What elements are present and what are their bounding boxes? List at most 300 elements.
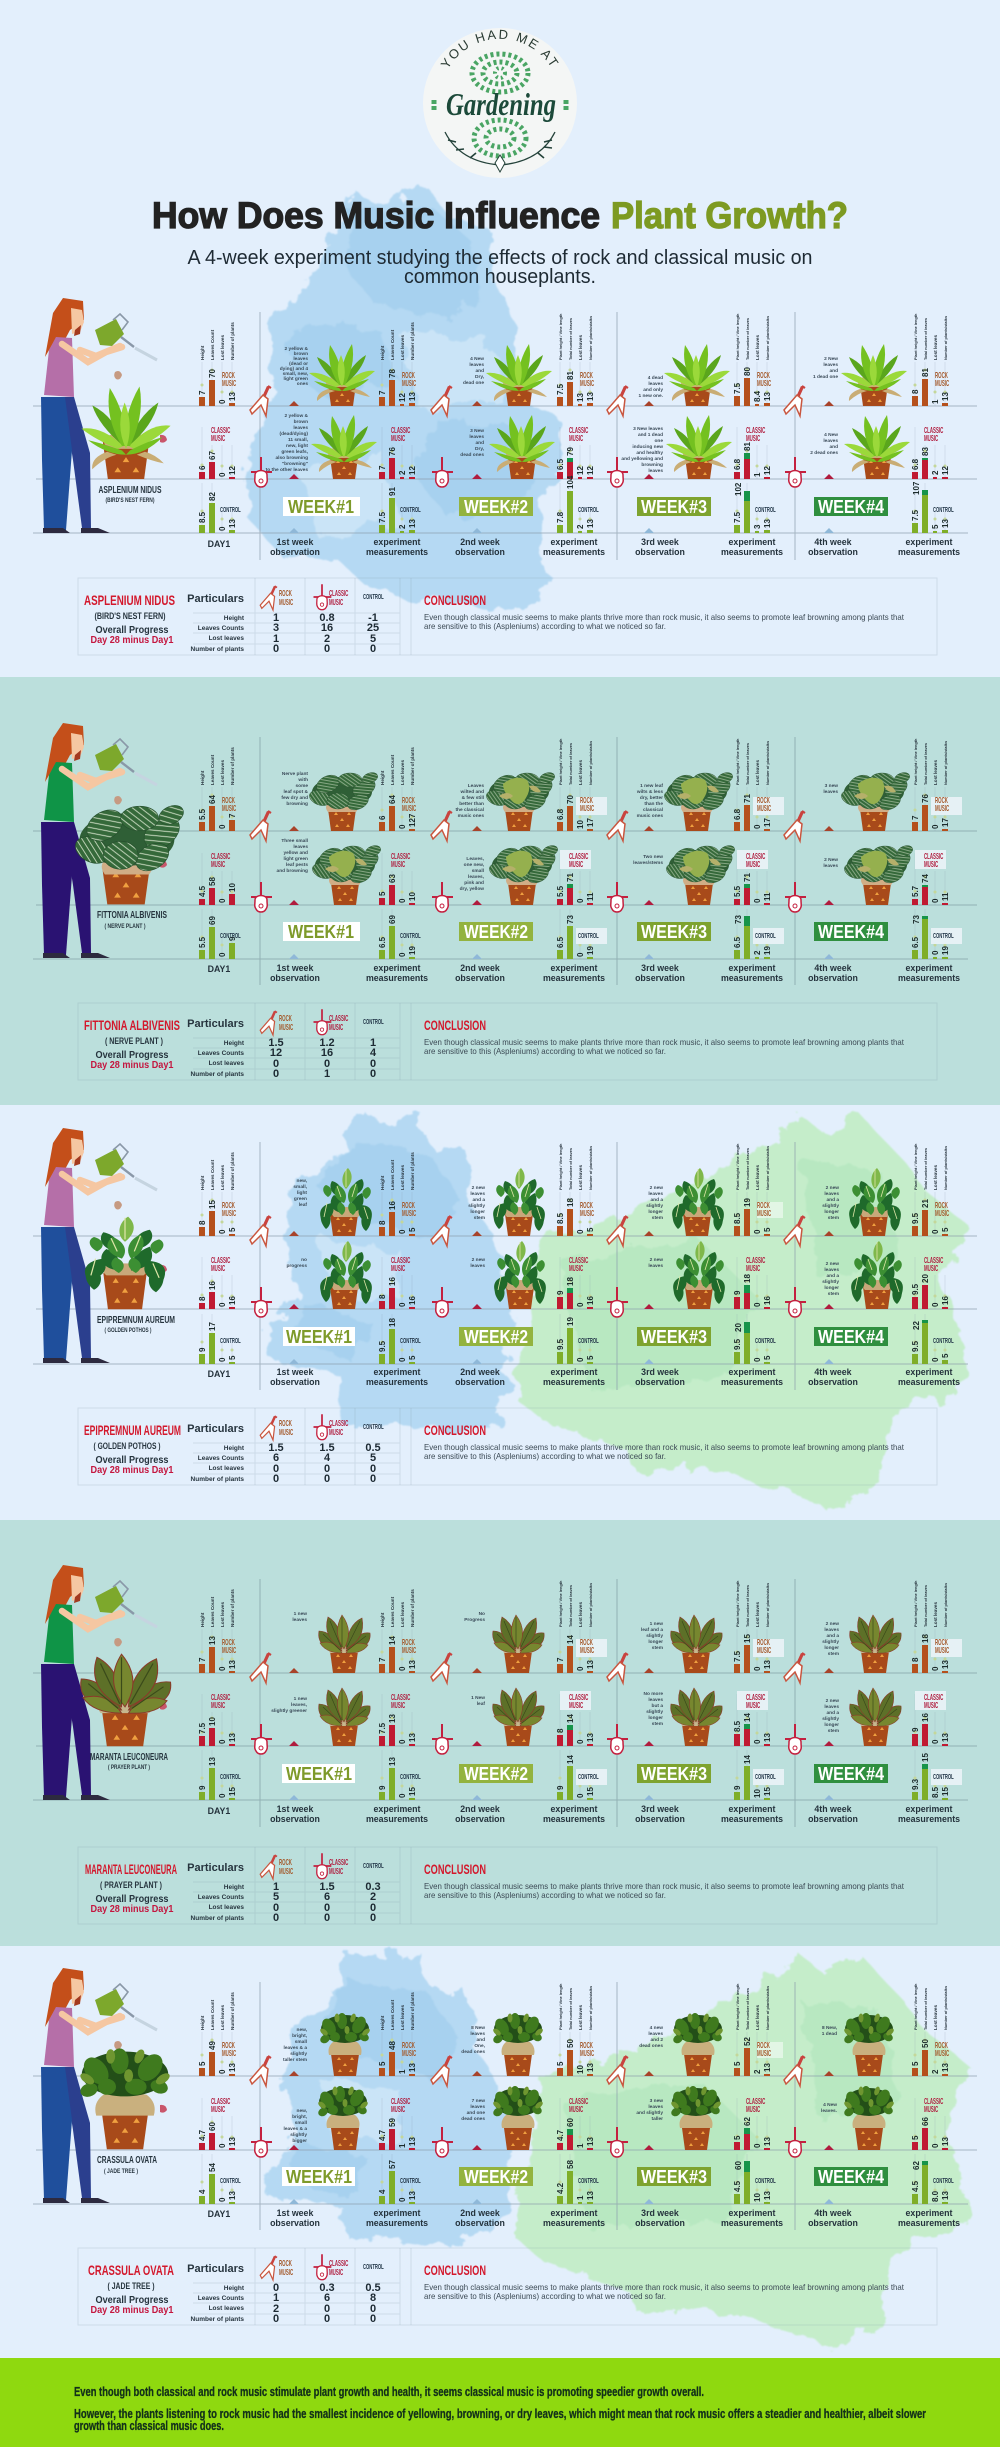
classic row day 1: 0 [218,898,227,903]
rock row week 1: 127 [408,813,417,827]
rock row week 3 [733,1143,783,1236]
observation notes [277,771,838,892]
summary table and conclusion: Particulars [187,2263,244,2275]
control row week 3: CONTROL [755,507,776,514]
observation notes: leaves [469,434,484,440]
summary table and conclusion: CONTROL [363,2264,384,2271]
observation notes: small [472,868,484,874]
summary table and conclusion: 1.2 [319,1037,335,1049]
control row week 1: 57 [388,2160,397,2169]
rock row day 1: Lost leaves [220,335,225,360]
control row week 1: 5 [408,1355,417,1360]
classic row week 1: 13 [408,1733,417,1742]
timeline labels: observation [808,2218,858,2228]
control row week 1: 15 [408,1787,417,1796]
observation notes: dry, better [640,795,663,801]
observation notes: and [475,440,484,446]
rock row day 1: ROCK [222,2042,235,2050]
classic row week 1: 13 [408,2137,417,2146]
summary table and conclusion: ( NERVE PLANT ) [105,1036,163,1047]
rock row week 3: 52 [743,2037,752,2046]
timeline labels: experiment [729,1367,776,1377]
observation notes: wilted and [460,789,484,795]
observation notes: browning [286,801,308,807]
rock row week 3: Plant height / Vine length [735,1983,740,2030]
control row day 1: 5.5 [198,936,207,948]
classic row week 3: 14 [743,1713,752,1722]
control row day 1: 82 [208,492,217,501]
rock row day 1: 5 [228,1227,237,1232]
week badges: WEEK#1 [286,2167,352,2187]
summary table and conclusion: 0 [273,643,279,655]
observation notes: 2 yellow & [285,413,309,419]
rock row week 3: Lost leaves [755,335,760,360]
control row day 1: CONTROL [220,1338,241,1345]
timeline labels: measurements [721,1377,783,1387]
observation notes: and [476,2037,485,2043]
summary table and conclusion: 0 [370,643,376,655]
summary table and conclusion: 16 [321,622,333,634]
control row week 1: 69 [388,915,397,924]
classic row week 2: MUSIC [569,861,583,869]
summary table and conclusion: 0 [370,1473,376,1485]
observation notes: small, [293,1184,308,1190]
week badges: WEEK#1 [288,497,354,517]
timeline labels: 3rd week [641,537,679,547]
timeline labels: measurements [898,1377,960,1387]
summary table and conclusion: 12 [270,1047,282,1059]
summary table and conclusion: MUSIC [329,599,343,607]
classic row week 3: 0 [753,898,762,903]
control row week 3: 5 [763,1355,772,1360]
observation notes: small, new, [283,371,309,377]
rock row week 1: Lost leaves [400,760,405,785]
rock row week 3: Number of plants/stalks [765,1146,770,1190]
plant name: ( NERVE PLANT ) [104,923,146,930]
observation notes: leaves [470,2031,485,2037]
rock row day 1: 13 [208,1636,217,1645]
rock row week 2: 18 [566,1198,575,1207]
summary table and conclusion: Number of plants [191,1476,244,1483]
control row week 4: 15 [941,1787,950,1796]
observation notes: 1 New [471,1695,485,1701]
rock row week 2: 81 [566,371,575,380]
control row week 3 [733,1750,784,1800]
observation notes: Dry, [475,446,485,452]
control row day 1: 0 [218,952,227,957]
observation notes [286,1179,839,1297]
control row week 1 [378,1314,421,1364]
control row day 1: 5 [228,1355,237,1360]
classic row week 1 [378,1257,417,1309]
summary table and conclusion: MARANTA LEUCONEURA [85,1861,177,1877]
timeline labels: experiment [551,537,598,547]
control row week 3: CONTROL [755,1338,776,1345]
observation notes: and slightly [636,2110,663,2116]
observation notes: 8 New [471,2025,485,2031]
observation notes: No [479,1611,485,1617]
summary table and conclusion: 0 [273,1473,279,1485]
classic row week 4: MUSIC [924,435,938,443]
observation notes: and a [826,1197,839,1203]
summary table and conclusion: 16 [321,1047,333,1059]
rock row week 2 [556,738,607,831]
observation notes: leaves [293,356,308,362]
summary table and conclusion: FITTONIA ALBIVENIS [84,1017,180,1033]
observation notes: slightly [290,2051,307,2057]
rock row week 3: ROCK [757,1639,770,1647]
observation notes: with [297,777,308,783]
rock row week 3: 13 [763,392,772,401]
summary table and conclusion: EPIPREMNUM AUREUM [84,1422,181,1438]
summary table and conclusion: ROCK [279,1420,292,1428]
control row week 3: 73 [734,915,743,924]
summary table and conclusion: MUSIC [329,1024,343,1032]
axis lines and dividers [33,1982,977,2230]
rock row week 3: MUSIC [757,1210,771,1218]
logo: you had me at gardening [423,28,577,178]
control row week 1: 4 [378,2189,387,2194]
timeline labels: experiment [551,963,598,973]
rock row day 1 [198,1152,237,1236]
summary table and conclusion: Overall Progress [96,1893,169,1905]
summary table and conclusion: Particulars [187,593,244,605]
timeline labels: observation [635,547,685,557]
rock row day 1: Height [200,1175,205,1190]
observation notes: and only [643,387,663,393]
plant name [98,485,162,504]
timeline labels [208,963,960,983]
observation notes: 2 new [650,1257,663,1263]
rock row week 1: Leaves Count [390,1999,395,2030]
rock row week 2: Total number of leaves [568,1148,573,1190]
classic row week 4 [911,1691,950,1746]
control row week 2: 15 [586,1787,595,1796]
summary table and conclusion: are sensitive to this (Aspleniums) according to what we noticed so far. [424,621,666,631]
classic row week 2: 0 [576,1302,585,1307]
timeline labels: DAY1 [208,964,230,974]
week badges: WEEK#2 [464,497,528,517]
control row week 1: 19 [408,946,417,955]
rock row week 2: 0 [576,1666,585,1671]
plant name: ( JADE TREE ) [104,2168,138,2175]
classic row week 3: CLASSIC [746,1257,765,1265]
control row day 1: 13 [208,1757,217,1766]
observation notes: leaves [648,381,663,387]
classic row day 1: MUSIC [211,2106,225,2114]
rock row week 3 [733,1983,783,2076]
rock row week 4: Total number of leaves [923,1585,928,1627]
summary table and conclusion: 4 [370,1047,377,1059]
instrument icons and markers [250,1653,834,1800]
control row week 3: 10 [753,1789,762,1798]
rock row week 3: ROCK [757,797,770,805]
summary table and conclusion: 1 [273,633,279,645]
classic row week 1: 0 [398,1739,407,1744]
summary table and conclusion: Day 28 minus Day1 [90,1904,174,1915]
control row day 1: 13 [228,519,237,528]
rock row week 3: Lost leaves [755,2005,760,2030]
observation notes: light green [283,856,308,862]
timeline labels: 4th week [814,963,852,973]
control row week 2: 0 [576,952,585,957]
control row day 1: 0 [218,2197,227,2202]
summary table and conclusion: Height [224,1445,245,1452]
timeline labels: observation [270,547,320,557]
rock row week 2: 5 [586,1227,595,1232]
observation notes: and 2 [650,2037,663,2043]
control row day 1 [198,1314,241,1364]
control row week 3: 9 [733,1785,742,1790]
panel: epipremnum aureum [33,1128,977,1485]
observation notes: 8 New, [822,2025,838,2031]
summary table and conclusion: Number of plants [191,1915,244,1922]
summary table and conclusion: ( PRAYER PLANT ) [100,1880,162,1891]
observation notes: slightly [646,1633,663,1639]
timeline labels: DAY1 [208,539,230,549]
rock row week 1: MUSIC [402,1647,416,1655]
observation notes: leaves & a [284,2126,307,2132]
observation notes: stem [828,1291,839,1297]
day 1 plant [72,802,186,904]
week badges: WEEK#3 [641,922,707,942]
classic row day 1 [198,1694,237,1746]
timeline labels: 1st week [277,537,313,547]
rock row week 3: 19 [743,1198,752,1207]
rock row week 4: 5 [911,2061,920,2066]
summary table and conclusion: 0.3 [319,2282,335,2294]
timeline labels: experiment [374,963,421,973]
rock row week 2: Number of plants/stalks [588,1583,593,1627]
rock row week 2: 7.5 [556,383,565,395]
rock row week 4: Lost leaves [933,1165,938,1190]
classic row week 3: 0 [753,1739,762,1744]
summary table and conclusion: ROCK [279,2260,292,2268]
classic row week 4: 16 [921,1713,930,1722]
rock row week 3: MUSIC [757,805,771,813]
timeline labels: experiment [374,1367,421,1377]
timeline labels: DAY1 [208,1806,230,1816]
logo: you had me at gardening: YOU HAD ME AT [440,30,559,66]
observation notes: 1 new one. [638,393,663,399]
summary table and conclusion: Leaves Counts [198,625,244,632]
classic row week 1: 7.5 [378,1722,387,1734]
control row week 4: 13 [941,2191,950,2200]
timeline labels: observation [635,1377,685,1387]
classic row week 2: CLASSIC [569,853,588,861]
summary table and conclusion: 0 [370,2313,376,2325]
observation notes: One, [474,2043,486,2049]
summary table and conclusion: 2 [370,1891,376,1903]
classic row day 1: 0 [218,472,227,477]
summary table and conclusion: Day 28 minus Day1 [90,2305,174,2316]
observation notes: slightly [822,1279,839,1285]
timeline labels: experiment [374,1804,421,1814]
classic row week 3 [733,850,772,905]
rock row week 1: Number of plants [410,1152,415,1190]
observation notes [266,346,838,474]
rock row day 1: Leaves Count [210,1596,215,1627]
control row day 1: 13 [228,2191,237,2200]
timeline labels [208,537,960,557]
rock row week 4: 50 [921,2039,930,2048]
timeline labels: measurements [366,547,428,557]
classic row week 2: CLASSIC [569,1694,588,1702]
summary table and conclusion [78,2248,937,2325]
classic row week 2: 18 [566,1277,575,1286]
summary table and conclusion: 0 [370,1463,376,1475]
rock row week 2: 13 [576,393,585,402]
classic row week 2: 79 [566,447,575,456]
control row week 2 [556,1750,607,1800]
summary table and conclusion: Height [224,615,245,622]
summary table and conclusion: MUSIC [279,1429,293,1437]
gardener watering [41,723,167,958]
classic row day 1: CLASSIC [211,1257,230,1265]
plant name [97,910,167,930]
rock row week 2: ROCK [580,2042,593,2050]
control row week 2: 19 [586,946,595,955]
timeline labels [208,1367,960,1387]
observation notes: Dry, [475,374,485,380]
observation notes: and a [826,1710,839,1716]
control row week 4: 107 [912,481,921,495]
rock row week 2: 13 [586,2063,595,2072]
observation notes: and a [650,1197,663,1203]
rock row day 1: 49 [208,2041,217,2050]
week badges: WEEK#4 [818,497,884,517]
rock row week 1: Height [380,1175,385,1190]
summary table and conclusion: CONCLUSION [424,1017,486,1033]
rock row week 2: ROCK [580,1202,593,1210]
control row week 4: CONTROL [933,1338,954,1345]
rock row day 1: Height [200,345,205,360]
observation notes: and [829,368,838,374]
rock row week 4: 81 [921,368,930,377]
classic row week 1: 16 [408,1296,417,1305]
observation notes: 4 New [470,356,484,362]
observation notes: dying) and 4 [280,366,308,372]
classic row week 3 [733,2098,772,2150]
rock row day 1: Height [200,770,205,785]
observation notes: and [475,368,484,374]
control row week 4 [911,1314,954,1364]
timeline labels [208,1804,960,1824]
rock row week 4: 13 [941,2063,950,2072]
rock row week 4: Number of plants/stalks [943,741,948,785]
control row week 4: 15 [921,1753,930,1762]
rock row week 2: MUSIC [580,1647,594,1655]
classic row week 4 [911,427,950,479]
timeline labels: 2nd week [460,1367,500,1377]
timeline labels: measurements [898,1814,960,1824]
classic row week 3: 71 [743,873,752,882]
summary table and conclusion: CONCLUSION [424,2262,486,2278]
axis lines and dividers [33,1579,977,1827]
observation notes: 3 new [650,2098,663,2104]
classic row week 4 [911,850,950,905]
classic row week 1 [378,427,417,479]
control row week 4: 8.0 [931,2190,940,2202]
control row day 1: 0 [218,1357,227,1362]
observation notes: slightly [822,1639,839,1645]
classic row day 1 [198,427,237,479]
panel: maranta leuconeura [33,1565,977,1924]
rock row week 1: 16 [388,1201,397,1210]
observation notes: dead ones [639,2043,663,2049]
observation notes: ones [297,382,308,387]
timeline labels: experiment [906,1804,953,1814]
rock row week 4: 17 [941,818,950,827]
rock row week 2: 70 [566,795,575,804]
classic row week 4: CLASSIC [924,1257,943,1265]
rock row week 3: Total number of leaves [745,743,750,785]
control row week 4: 62 [912,2161,921,2170]
classic row week 4: 0 [931,898,940,903]
observation notes: 3 New leaves [633,426,663,432]
classic row week 2: 8 [556,1728,565,1733]
day 1 plant [78,2048,172,2149]
classic row week 4: 13 [941,2137,950,2146]
summary table and conclusion: 1.5 [268,1037,284,1049]
summary table and conclusion: ( JADE TREE ) [108,2281,154,2292]
title [152,195,848,236]
summary table and conclusion: Lost leaves [209,635,244,642]
classic row week 4: 20 [921,1274,930,1283]
rock row week 4: Lost leaves [933,1602,938,1627]
timeline labels: 2nd week [460,537,500,547]
control row week 1: 9 [378,1785,387,1790]
day 1 plant [85,1217,165,1309]
classic row week 2: 12 [576,466,585,475]
rock row week 2: 8.5 [556,1212,565,1224]
control row week 3 [733,1314,776,1364]
control row week 3: 102 [734,482,743,496]
observation notes: leaves [648,1191,663,1197]
control row week 3: 60 [734,2161,743,2170]
summary table and conclusion: 8 [370,2292,376,2304]
rock row week 1 [378,1152,417,1236]
timeline labels: measurements [543,973,605,983]
classic row week 2: 13 [586,2137,595,2146]
plant name: ASPLENIUM NIDUS [98,485,162,496]
classic row day 1: MUSIC [211,1265,225,1273]
timeline labels: measurements [366,1814,428,1824]
control row day 1: 69 [208,916,217,925]
rock row week 4 [911,313,950,406]
timeline labels: measurements [543,1814,605,1824]
control row week 2: 13 [586,519,595,528]
rock row week 1 [378,1992,417,2076]
rock row week 1: ROCK [402,372,415,380]
classic row week 3: 62 [743,2117,752,2126]
rock row week 4 [911,1983,950,2076]
rock row week 2: Total number of leaves [568,318,573,360]
rock row week 4: 8 [911,389,920,394]
week badges: WEEK#3 [641,1327,707,1347]
control row week 2: 7.8 [556,511,565,523]
summary table and conclusion: 0 [273,2282,279,2294]
rock row week 3: Total number of leaves [745,318,750,360]
control row day 1: 0 [218,1793,227,1798]
summary table and conclusion: 0.5 [365,1442,381,1454]
classic row week 3: MUSIC [746,2106,760,2114]
summary table and conclusion: CLASSIC [329,1420,348,1428]
observation notes: better than [459,801,484,807]
summary table and conclusion: Lost leaves [209,1060,244,1067]
observation notes: leaves [648,2031,663,2037]
control row week 2: 9.5 [556,1338,565,1350]
